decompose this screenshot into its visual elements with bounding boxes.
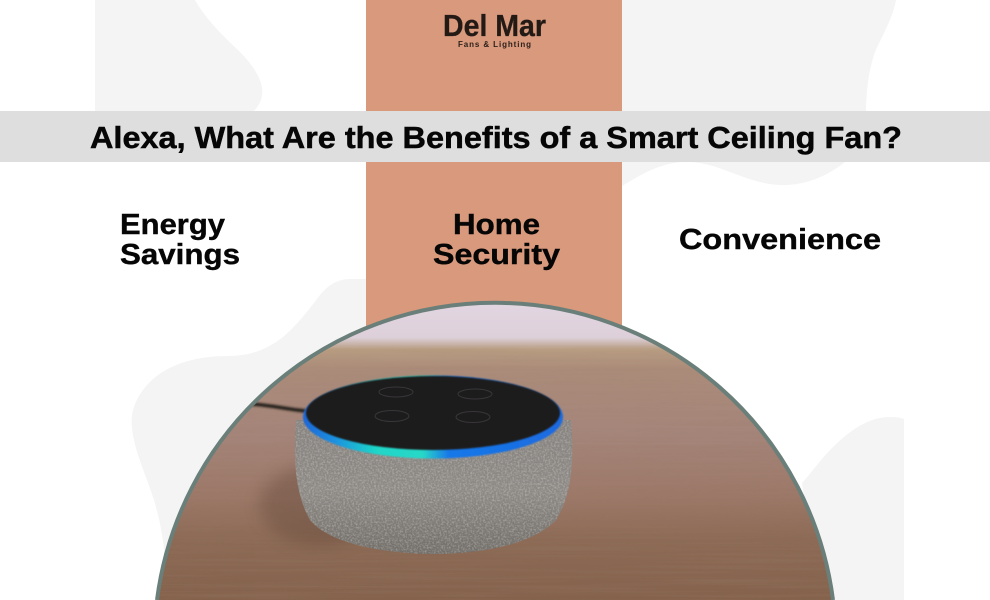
blob: top right [622, 0, 896, 186]
light ring [303, 376, 563, 458]
column label: home security [433, 209, 560, 271]
buttons [375, 387, 492, 422]
smart speaker [290, 376, 580, 560]
blob: lower right [802, 417, 904, 600]
salmon column [366, 0, 622, 340]
logo: Del Mar [443, 8, 546, 43]
logo: Fans & Lighting [458, 40, 531, 49]
blob: top left [95, 0, 262, 113]
circular photo: smart speaker on wooden table [150, 300, 840, 600]
column label: energy savings: Energy [120, 209, 225, 241]
blob: lower left [132, 279, 400, 570]
wooden table [150, 300, 840, 600]
column label: home security: Security [433, 239, 560, 271]
column label: energy savings [120, 209, 240, 271]
title band [0, 111, 990, 162]
column label: energy savings: Savings [120, 239, 240, 271]
top surface [306, 376, 560, 450]
fabric body [295, 420, 572, 554]
title: Alexa, What Are the Benefits of a Smart Ceiling Fan? [90, 120, 902, 155]
column label: convenience: Convenience [679, 224, 881, 256]
column label: home security: Home [453, 209, 540, 241]
shadow [258, 465, 346, 546]
circle outline [157, 303, 833, 600]
power cable [250, 404, 306, 411]
